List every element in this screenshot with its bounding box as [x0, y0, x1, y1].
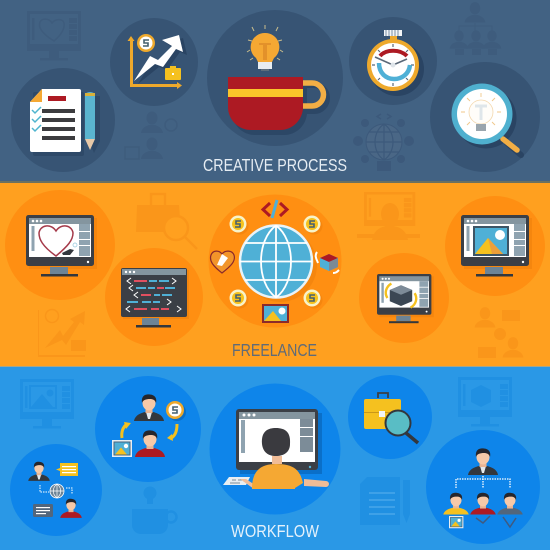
icon: suited person	[28, 462, 50, 481]
icon: gray team member	[497, 493, 523, 514]
icon: yellow team member	[443, 493, 469, 514]
ghost icon: heart monitor	[27, 11, 81, 60]
icon: yellow message	[56, 463, 78, 476]
circle: coffee cup	[207, 10, 343, 146]
circle: checklist	[11, 68, 115, 172]
circle: briefcase search	[348, 375, 432, 459]
icon: code monitor	[121, 268, 189, 328]
icon: light bulb	[247, 25, 283, 71]
icon: image monitor	[461, 215, 532, 276]
icon: checklist document	[30, 89, 84, 156]
circle: image monitor	[445, 196, 545, 296]
icon: coins	[230, 216, 322, 308]
ghost icon: image monitor	[20, 379, 74, 428]
circle: globe	[208, 194, 342, 328]
icon: picture	[112, 440, 132, 457]
circle: growth chart	[110, 18, 198, 106]
ghost icon: people and money	[125, 112, 177, 159]
icon: suited person	[134, 394, 164, 421]
icon: coffee cup	[228, 77, 327, 135]
icon: team picture	[449, 516, 463, 528]
icon: manager	[468, 448, 498, 475]
icon: person in red	[60, 499, 82, 518]
ghost icon: briefcase search	[136, 194, 197, 249]
circle: heart monitor	[5, 190, 115, 300]
icon: magnifier with bulb	[452, 84, 521, 155]
icon: heart monitor	[26, 215, 97, 276]
panel: creative process	[0, 0, 550, 183]
icon: magnifying glass	[386, 410, 418, 443]
circle: team communication	[10, 444, 102, 536]
icon: globe	[40, 484, 72, 498]
circle: org structure	[426, 430, 540, 544]
icon: gray message	[33, 504, 53, 517]
icon: code tag	[263, 200, 287, 218]
icon: connector lines	[456, 476, 510, 488]
icon: cube	[316, 252, 339, 273]
circle: stopwatch	[349, 17, 437, 105]
icon: picture	[262, 304, 289, 323]
icon: team code	[476, 516, 516, 527]
icon: person from behind	[223, 428, 329, 489]
icon: pencil	[85, 92, 100, 153]
icon: growth chart	[128, 34, 187, 89]
icon: briefcase	[364, 393, 401, 429]
icon: monitor	[236, 409, 322, 474]
title: workflow: WORKFLOW	[231, 521, 319, 541]
ghost icon: growth chart	[38, 310, 86, 357]
ghost icon: globe	[353, 114, 414, 171]
ghost icon: document and pencil	[360, 477, 410, 525]
panel: freelance	[0, 183, 550, 366]
icon: red team member	[470, 493, 496, 514]
icon: person in red	[135, 430, 165, 457]
ghost icon: org chart	[450, 2, 501, 55]
icon: globe	[240, 226, 317, 302]
circle: cube monitor	[359, 253, 449, 343]
title: creative process: CREATIVE PROCESS	[203, 155, 347, 175]
icon: heart with pen	[210, 251, 234, 273]
circle: person at monitor	[210, 384, 340, 514]
circle: code monitor	[105, 248, 203, 346]
icon: exchange arrows	[122, 422, 177, 441]
ghost icon: group network	[475, 307, 523, 358]
icon: stopwatch	[367, 30, 424, 96]
ghost icon: cube monitor	[458, 377, 512, 426]
circle: magnifier idea	[430, 62, 540, 172]
icon: dollar coin	[166, 401, 186, 421]
panel: workflow	[0, 366, 550, 550]
circle: client exchange	[95, 376, 201, 482]
ghost icon: person at monitor	[357, 192, 420, 240]
ghost icon: coffee cup	[132, 486, 176, 534]
icon: cube monitor	[377, 274, 434, 323]
title: freelance: FREELANCE	[232, 340, 317, 360]
